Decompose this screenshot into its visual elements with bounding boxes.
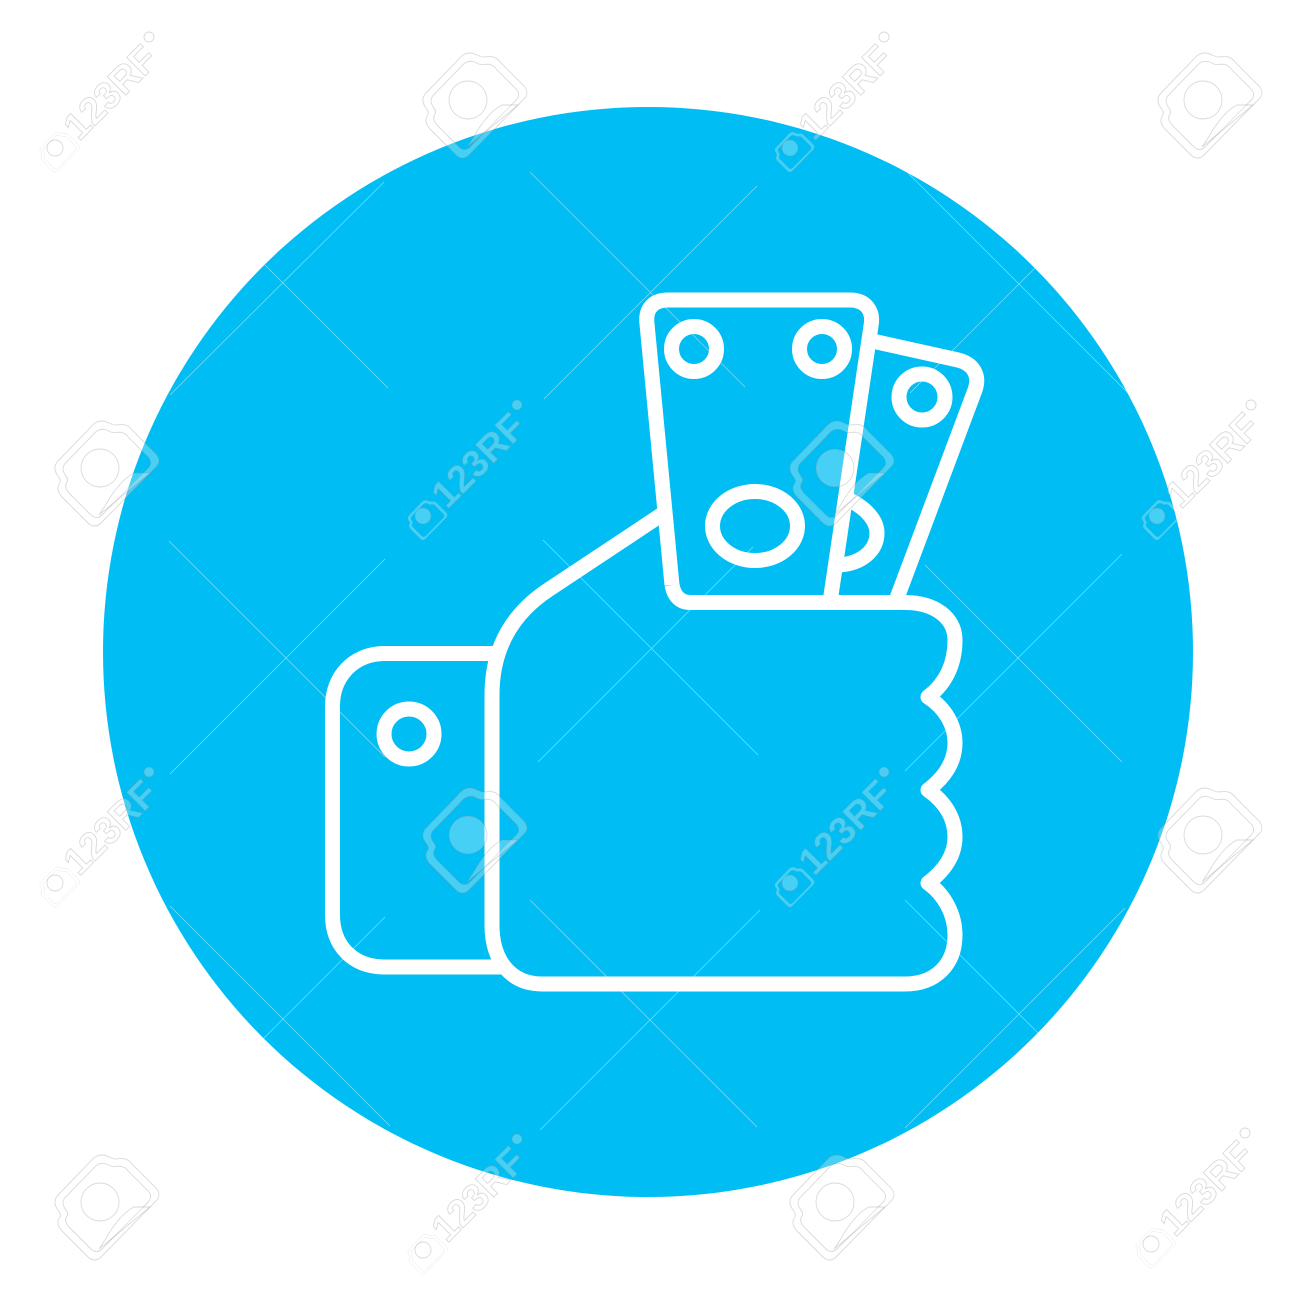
watermark: 123RF logo 2: 123RF bbox=[791, 38, 901, 148]
watermark: egg logo 8 bbox=[790, 1155, 894, 1260]
watermark: egg logo 3 bbox=[55, 421, 159, 526]
watermark: 123RF logo 2 bbox=[775, 32, 901, 172]
watermark: 123RF logo 7: 123RF bbox=[424, 1140, 534, 1250]
watermark: egg logo 6 bbox=[1158, 788, 1262, 893]
watermark: egg logo 7 bbox=[55, 1155, 159, 1260]
watermark: egg logo 5 bbox=[423, 788, 527, 893]
watermark: egg logo 2 bbox=[1158, 53, 1262, 158]
watermark: egg logo 4 bbox=[790, 421, 894, 526]
watermark: 123RF logo 5 bbox=[40, 767, 166, 907]
watermark: 123RF logo 8: 123RF bbox=[1152, 1134, 1262, 1244]
watermark: 123RF logo 3 bbox=[408, 400, 534, 540]
watermark: 123RF logo 4 bbox=[1142, 400, 1268, 540]
watermark: 123RF logo 1: 123RF bbox=[56, 38, 166, 148]
watermark: 123RF logo 7 bbox=[408, 1134, 534, 1274]
sleeve cuff bbox=[332, 654, 504, 967]
watermark: 123RF logo 6 bbox=[775, 767, 901, 907]
watermark: 123RF logo 5: 123RF bbox=[56, 773, 166, 883]
watermark: 123RF logo 1 bbox=[40, 32, 166, 172]
blue background circle bbox=[103, 107, 1193, 1197]
watermark: 123RF logo 6: 123RF bbox=[791, 773, 901, 883]
watermark: egg logo 1 bbox=[423, 53, 527, 158]
watermark: 123RF logo 8 bbox=[1136, 1128, 1262, 1268]
fist bbox=[492, 513, 955, 984]
front banknote bbox=[647, 300, 872, 602]
back banknote bbox=[838, 340, 977, 598]
icon: hand holding money bbox=[332, 300, 977, 984]
watermark: 123RF logo 3: 123RF bbox=[424, 406, 534, 516]
watermark: 123RF logo 4: 123RF bbox=[1158, 406, 1268, 516]
